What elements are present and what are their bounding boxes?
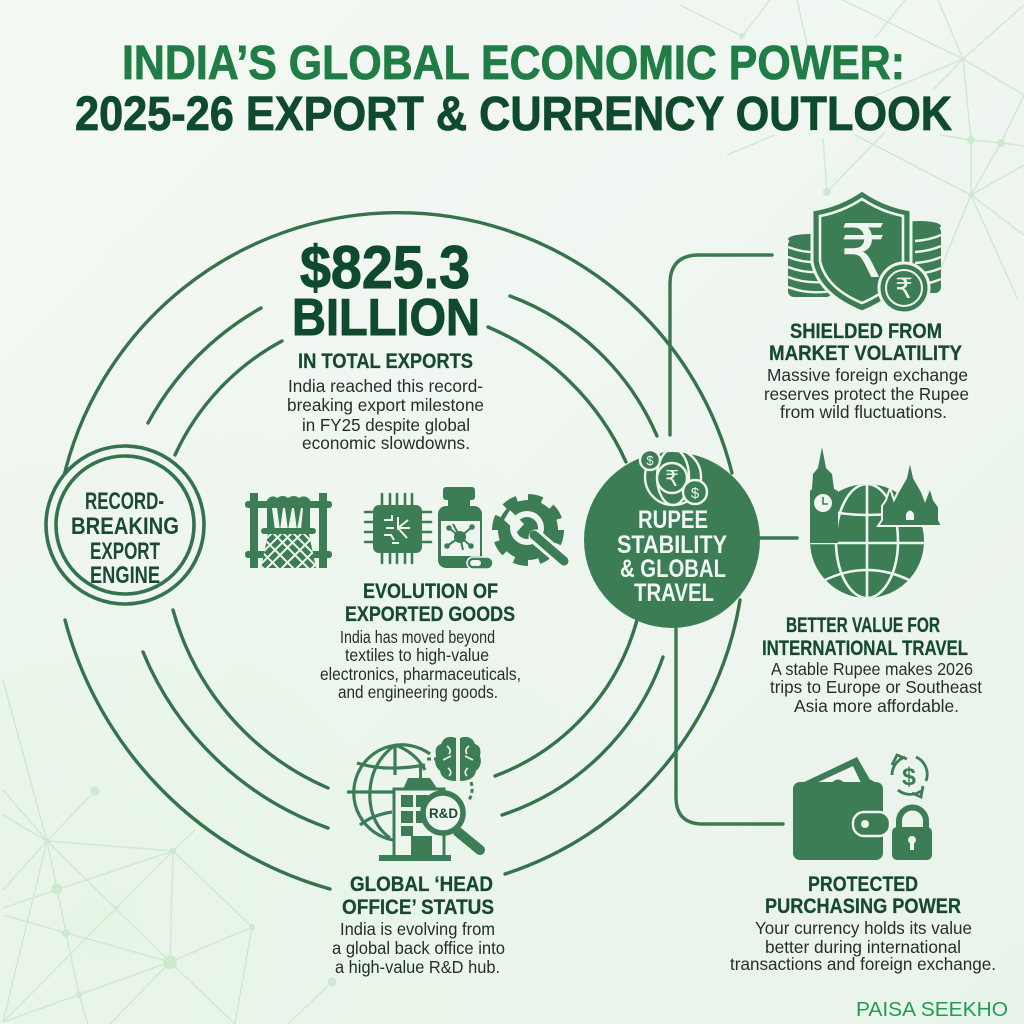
hub: record-breaking export engine: EXPORT bbox=[90, 538, 160, 565]
export total statistic bbox=[287, 234, 484, 453]
hub: rupee stability and global travel bbox=[584, 449, 760, 628]
text: shielded from market volatility: reserves protect the Rupee bbox=[764, 384, 969, 404]
title bbox=[75, 37, 952, 141]
text: better value for international travel: INTERNATIONAL TRAVEL bbox=[762, 637, 968, 660]
background network top right bbox=[680, 0, 1024, 300]
export total statistic: in FY25 despite global bbox=[302, 415, 470, 435]
text: better value for international travel: trips to Europe or Southeast bbox=[770, 677, 982, 697]
text: evolution of exported goods bbox=[320, 580, 521, 702]
icon: medicine bottle bbox=[438, 487, 493, 569]
text: global head office status: India is evolving from bbox=[340, 919, 495, 939]
hub: rupee stability and global travel: STABILITY bbox=[617, 531, 727, 559]
text: global head office status: GLOBAL ‘HEAD bbox=[350, 873, 493, 896]
text: protected purchasing power: PURCHASING POWER bbox=[765, 895, 961, 918]
icon: padlock bbox=[892, 808, 932, 860]
text: protected purchasing power: better during international bbox=[765, 937, 961, 957]
hub: record-breaking export engine: RECORD- bbox=[85, 488, 164, 515]
text: evolution of exported goods: electronics, pharmaceuticals, bbox=[320, 664, 521, 684]
icon: rupee globe: $ bbox=[691, 485, 700, 502]
icon: dollar exchange: $ bbox=[902, 763, 916, 791]
text: evolution of exported goods: India has moved beyond bbox=[340, 627, 495, 647]
icon: rupee shield with coins bbox=[788, 190, 941, 313]
icon: wallet with lock bbox=[793, 755, 932, 860]
text: evolution of exported goods: EVOLUTION OF bbox=[363, 580, 498, 603]
hub: record-breaking export engine: BREAKING bbox=[71, 513, 179, 540]
icon: clock tower bbox=[810, 447, 838, 543]
text: shielded from market volatility bbox=[764, 320, 969, 422]
hub: record-breaking export engine bbox=[46, 446, 204, 604]
icon: brain bbox=[435, 737, 481, 781]
icon: global R&D office bbox=[347, 737, 481, 861]
export total statistic: $825.3 bbox=[300, 234, 470, 301]
icon: textile loom bbox=[245, 493, 332, 568]
text: global head office status bbox=[332, 873, 505, 977]
text: shielded from market volatility: SHIELDED FROM bbox=[790, 320, 942, 343]
icon: rupee shield with coins: ₹ bbox=[839, 210, 887, 293]
icon: rupee globe: ₹ bbox=[665, 466, 679, 491]
text: shielded from market volatility: from wild fluctuations. bbox=[780, 402, 947, 422]
hub: rupee stability and global travel: & GLOBAL bbox=[620, 555, 726, 583]
text: global head office status: OFFICE’ STATUS bbox=[342, 896, 494, 919]
text: better value for international travel: Asia more affordable. bbox=[794, 696, 959, 716]
text: protected purchasing power: transactions and foreign exchange. bbox=[730, 954, 996, 974]
concentric ring arcs bbox=[63, 213, 740, 889]
icon: globe with landmarks bbox=[810, 447, 942, 598]
brand mark: PAISA SEEKHO bbox=[856, 998, 1008, 1021]
hub: record-breaking export engine: ENGINE bbox=[90, 562, 160, 589]
text: protected purchasing power: PROTECTED bbox=[808, 873, 918, 896]
text: better value for international travel: BETTER VALUE FOR bbox=[786, 614, 940, 637]
text: shielded from market volatility: Massive foreign exchange bbox=[767, 365, 968, 385]
export total statistic: economic slowdowns. bbox=[302, 433, 470, 453]
text: better value for international travel bbox=[762, 614, 982, 716]
connector lines bbox=[670, 255, 797, 824]
export total statistic: India reached this record- bbox=[288, 376, 483, 396]
icon: global R&D office: R&D bbox=[429, 806, 458, 821]
icon: microchip bbox=[365, 494, 431, 563]
text: evolution of exported goods: and engineering goods. bbox=[338, 682, 498, 702]
coin stack right bbox=[899, 221, 941, 293]
text: global head office status: a global back office into bbox=[332, 938, 505, 958]
export total statistic: breaking export milestone bbox=[287, 395, 484, 415]
text: shielded from market volatility: MARKET VOLATILITY bbox=[769, 342, 962, 365]
hub: rupee stability and global travel: TRAVEL bbox=[634, 579, 714, 607]
title: 2025-26 EXPORT & CURRENCY OUTLOOK bbox=[75, 88, 952, 141]
icon: rupee shield with coins: ₹ bbox=[895, 273, 913, 304]
icon: rupee globe: $ bbox=[646, 453, 654, 468]
text: better value for international travel: A stable Rupee makes 2026 bbox=[771, 659, 973, 679]
export total statistic: IN TOTAL EXPORTS bbox=[298, 350, 473, 373]
title: INDIA’S GLOBAL ECONOMIC POWER: bbox=[122, 37, 905, 90]
coin stack left bbox=[788, 234, 832, 297]
text: protected purchasing power: Your currency holds its value bbox=[755, 918, 972, 938]
hub: rupee stability and global travel: RUPEE bbox=[638, 506, 708, 534]
icon: gear and wrench bbox=[496, 498, 564, 562]
text: evolution of exported goods: textiles to high-value bbox=[345, 645, 489, 665]
text: global head office status: a high-value R&D hub. bbox=[335, 957, 500, 977]
background network bottom left bbox=[3, 680, 336, 1024]
export total statistic: BILLION bbox=[292, 289, 480, 347]
text: protected purchasing power bbox=[730, 873, 996, 974]
text: evolution of exported goods: EXPORTED GOODS bbox=[345, 603, 515, 626]
icon: rupee globe bbox=[640, 449, 707, 505]
icon: temple bbox=[878, 460, 942, 526]
